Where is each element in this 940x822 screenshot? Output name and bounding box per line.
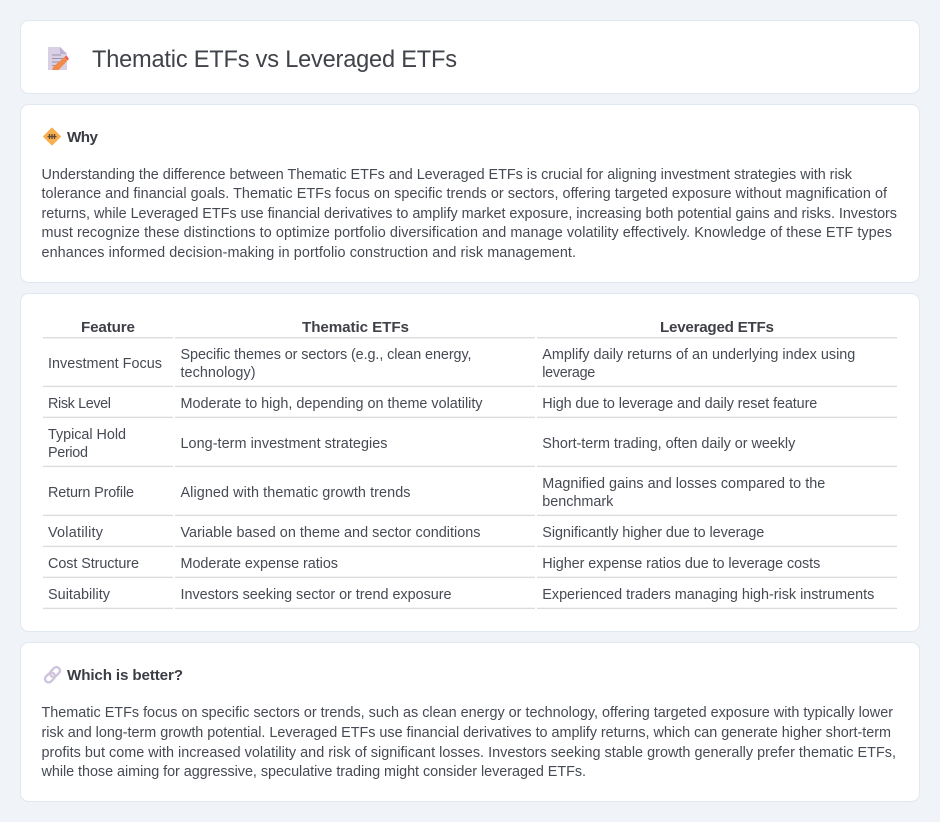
text block: why paragraph: must recognize these distinctions to optimize portfolio diversification and manage volatility effectively. Knowledge of these ETF types xyxy=(42,225,892,241)
row: return profile: Return Profile xyxy=(48,485,134,501)
table header xyxy=(81,319,774,336)
row: cost structure xyxy=(48,556,820,572)
row: volatility: Volatility xyxy=(48,525,104,541)
title: Thematic ETFs vs Leveraged ETFs xyxy=(92,47,457,73)
row: cost structure: Moderate expense ratios xyxy=(180,556,338,572)
row: risk level: High due to leverage and daily reset feature xyxy=(542,396,817,412)
text block: which paragraph: risk and long-term growth potential. Leveraged ETFs use financial derivatives to amplify returns, which can generate higher short-term xyxy=(42,725,891,741)
text block: why paragraph: tolerance and financial goals. Thematic ETFs focus on specific trends or sectors, offering targeted exposure without magnification of xyxy=(42,186,888,202)
icon: document with pencil xyxy=(48,47,69,70)
heading: why: Why xyxy=(67,129,99,146)
row: investment focus: leverage xyxy=(542,365,595,381)
row: risk level xyxy=(48,396,817,412)
text block: which paragraph xyxy=(40,705,896,780)
text block: why paragraph: enhances informed decision-making in portfolio construction and risk management. xyxy=(42,245,576,261)
row: suitability xyxy=(48,587,874,603)
row: investment focus: Specific themes or sectors (e.g., clean energy, xyxy=(180,347,472,363)
panel: which is better xyxy=(20,642,920,802)
text block: which paragraph: Thematic ETFs focus on specific sectors or trends, such as clean energy or technology, offering targeted exposure with typically lower xyxy=(42,705,893,721)
row: investment focus: Amplify daily returns of an underlying index using xyxy=(542,347,855,363)
panel: header xyxy=(20,20,920,94)
table header: Feature xyxy=(81,319,135,336)
row: typical hold period xyxy=(48,427,796,461)
text block: why paragraph: Understanding the difference between Thematic ETFs and Leveraged ETFs is crucial for aligning investment strategies with risk xyxy=(42,167,853,183)
row: typical hold period: Long-term investment strategies xyxy=(180,436,388,452)
row: investment focus: technology) xyxy=(180,365,256,381)
icon: chain link xyxy=(44,666,61,684)
panel: comparison table xyxy=(20,294,920,632)
row: typical hold period: Period xyxy=(48,445,88,461)
row: suitability: Investors seeking sector or trend exposure xyxy=(180,587,452,603)
row: volatility: Significantly higher due to leverage xyxy=(542,525,764,541)
row: suitability: Suitability xyxy=(48,587,111,603)
row: typical hold period: Typical Hold xyxy=(48,427,126,443)
row: volatility: Variable based on theme and sector conditions xyxy=(180,525,480,541)
row: suitability: Experienced traders managing high-risk instruments xyxy=(542,587,874,603)
row: return profile: Aligned with thematic growth trends xyxy=(180,485,410,501)
row: risk level: Moderate to high, depending on theme volatility xyxy=(180,396,483,412)
row: return profile xyxy=(48,476,825,510)
row: investment focus: Investment Focus xyxy=(48,356,162,372)
table header: Thematic ETFs xyxy=(302,319,409,336)
text block: why paragraph: returns, while Leveraged ETFs use financial derivatives to amplify market exposure, increasing both potential gains and risks. Investors xyxy=(42,206,897,222)
icon: orange diamond sign xyxy=(44,128,60,145)
heading: which is better: Which is better? xyxy=(67,667,183,684)
row: typical hold period: Short-term trading, often daily or weekly xyxy=(542,436,796,452)
row: return profile: Magnified gains and losses compared to the xyxy=(542,476,825,492)
row: return profile: benchmark xyxy=(542,494,614,510)
row: investment focus xyxy=(48,347,855,381)
panel: why xyxy=(20,104,920,282)
text block: which paragraph: profits but come with increased volatility and risk of significant losses. Investors seeking stable growth generally prefer thematic ETFs, xyxy=(42,745,896,761)
row: cost structure: Cost Structure xyxy=(48,556,139,572)
row: cost structure: Higher expense ratios due to leverage costs xyxy=(542,556,820,572)
text block: why paragraph xyxy=(42,167,897,261)
row: volatility xyxy=(48,525,764,541)
table header: Leveraged ETFs xyxy=(660,319,774,336)
text block: which paragraph: while those aiming for aggressive, speculative trading might consider leveraged ETFs. xyxy=(40,764,586,780)
row: risk level: Risk Level xyxy=(48,396,111,412)
